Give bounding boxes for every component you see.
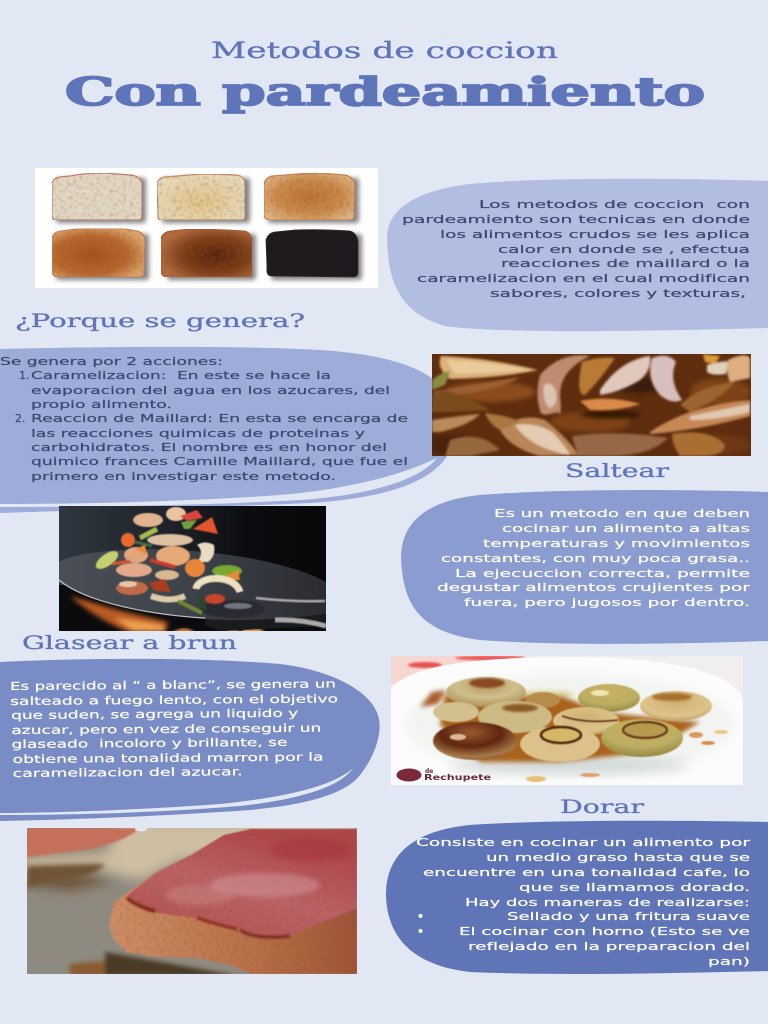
text: introduction: caramelizacion en el cual modifican: [417, 272, 750, 285]
blob: dorar: [386, 821, 768, 974]
logo: de Rechupete: de: [425, 768, 433, 775]
text: dorar description: Sellado y una fritura suave: [507, 910, 750, 923]
heading: saltear: Saltear: [565, 460, 670, 482]
text: saltear description: constantes, con muy poca grasa..: [441, 552, 750, 565]
text: saltear description: temperaturas y movimientos: [483, 537, 750, 550]
title block: [65, 39, 705, 114]
text: reasons list: Se genera por 2 acciones:: [0, 355, 223, 368]
text: introduction: reacciones de maillard o la: [501, 257, 750, 270]
text: introduction: Los metodos de coccion con: [479, 198, 750, 211]
text: dorar description: reflejado en la preparacion del: [468, 940, 750, 953]
main title: Con pardeamiento: [65, 69, 705, 114]
text: introduction: calor en donde se , efectua: [498, 243, 750, 256]
text: dorar description: •: [417, 925, 424, 938]
text: dorar description: pan): [708, 955, 750, 968]
image: wok with shrimp and flames: [59, 506, 326, 632]
text: dorar description: [416, 836, 751, 968]
image: caramelized onions: [425, 354, 751, 456]
blob with swoosh: [0, 347, 448, 513]
heading: porque se genera: ¿Porque se genera?: [15, 310, 305, 332]
text: reasons list: Reaccion de Maillard: En esta se encarga de: [31, 412, 408, 425]
text: reasons list: primero en investigar este metodo.: [31, 470, 336, 483]
panel: why it happens: [0, 347, 448, 513]
text: glasear description: Es parecido al “ a blanc”, se genera un: [10, 677, 336, 693]
panel: glasear a brun: [0, 659, 380, 821]
text: glasear description: azucar, pero en vez de conseguir un: [11, 722, 321, 737]
heading: glasear a brun: Glasear a brun: [22, 632, 237, 654]
text: glasear description: caramelizacion del azucar.: [13, 765, 243, 780]
text: introduction: [402, 198, 750, 300]
text: saltear description: Es un metodo en que deben: [494, 507, 750, 520]
logo: de Rechupete: Rechupete: [424, 773, 492, 782]
text: saltear description: fuera, pero jugosos por dentro.: [464, 596, 750, 609]
heading: dorar: Dorar: [560, 796, 645, 818]
text: dorar description: encuentre en una tonalidad cafe, lo: [423, 866, 750, 879]
subtitle: Metodos de coccion: [211, 39, 558, 64]
text: glasear description: [10, 677, 339, 780]
text: reasons list: evaporacion del agua en los azucares, del: [31, 384, 390, 397]
text: glasear description: que suden, se agrega un liquido y: [11, 707, 299, 722]
blob with swoosh: [0, 659, 380, 821]
text: introduction: los alimentos crudos se les aplica: [440, 228, 750, 241]
text: introduction: sabores, colores y texturas,: [490, 287, 746, 300]
text: glasear description: salteado a fuego lento, con el objetivo: [10, 692, 339, 708]
text: dorar description: un medio graso hasta que se: [486, 851, 750, 864]
text: introduction: pardeamiento son tecnicas en donde: [402, 213, 750, 226]
text: reasons list: carbohidratos. El nombre es en honor del: [31, 441, 387, 454]
text: reasons list: Caramelizacion: En este se hace la: [31, 369, 331, 382]
text: reasons list: las reacciones quimicas de proteinas y: [31, 427, 366, 440]
text: reasons list: quimico frances Camille Maillard, que fue el: [31, 455, 408, 468]
image: glazed onions on plate: [391, 656, 743, 785]
text: dorar description: Hay dos maneras de realizarse:: [465, 896, 750, 909]
blob: saltear: [401, 490, 768, 644]
panel: saltear: [401, 490, 768, 644]
text: saltear description: La ejecuccion correcta, permite: [455, 567, 750, 580]
text: dorar description: •: [417, 910, 424, 923]
text: saltear description: [437, 507, 751, 609]
panel: dorar: [386, 821, 768, 974]
text: glasear description: glaseado incoloro y brillante, se: [11, 736, 288, 751]
text: saltear description: cocinar un alimento a altas: [502, 522, 750, 535]
text: reasons list: 2.: [15, 412, 26, 425]
text: reasons list: 1.: [19, 369, 30, 382]
image: toast browning stages: [35, 168, 378, 288]
image: seared steak: [20, 820, 357, 976]
text: dorar description: Consiste en cocinar un alimento por: [416, 836, 751, 849]
text: glasear description: obtiene una tonalidad marron por la: [12, 751, 324, 766]
text: saltear description: degustar alimentos crujientes por: [437, 581, 751, 594]
text: reasons list: [0, 355, 408, 483]
text: dorar description: que se llamamos dorado.: [519, 881, 750, 894]
text: reasons list: propio alimento.: [31, 398, 172, 411]
blob: introduction: [387, 179, 768, 331]
panel: introduction: [387, 179, 768, 331]
text: dorar description: El cocinar con horno (Esto se ve: [459, 925, 750, 938]
logo: de Rechupete: [396, 768, 492, 782]
